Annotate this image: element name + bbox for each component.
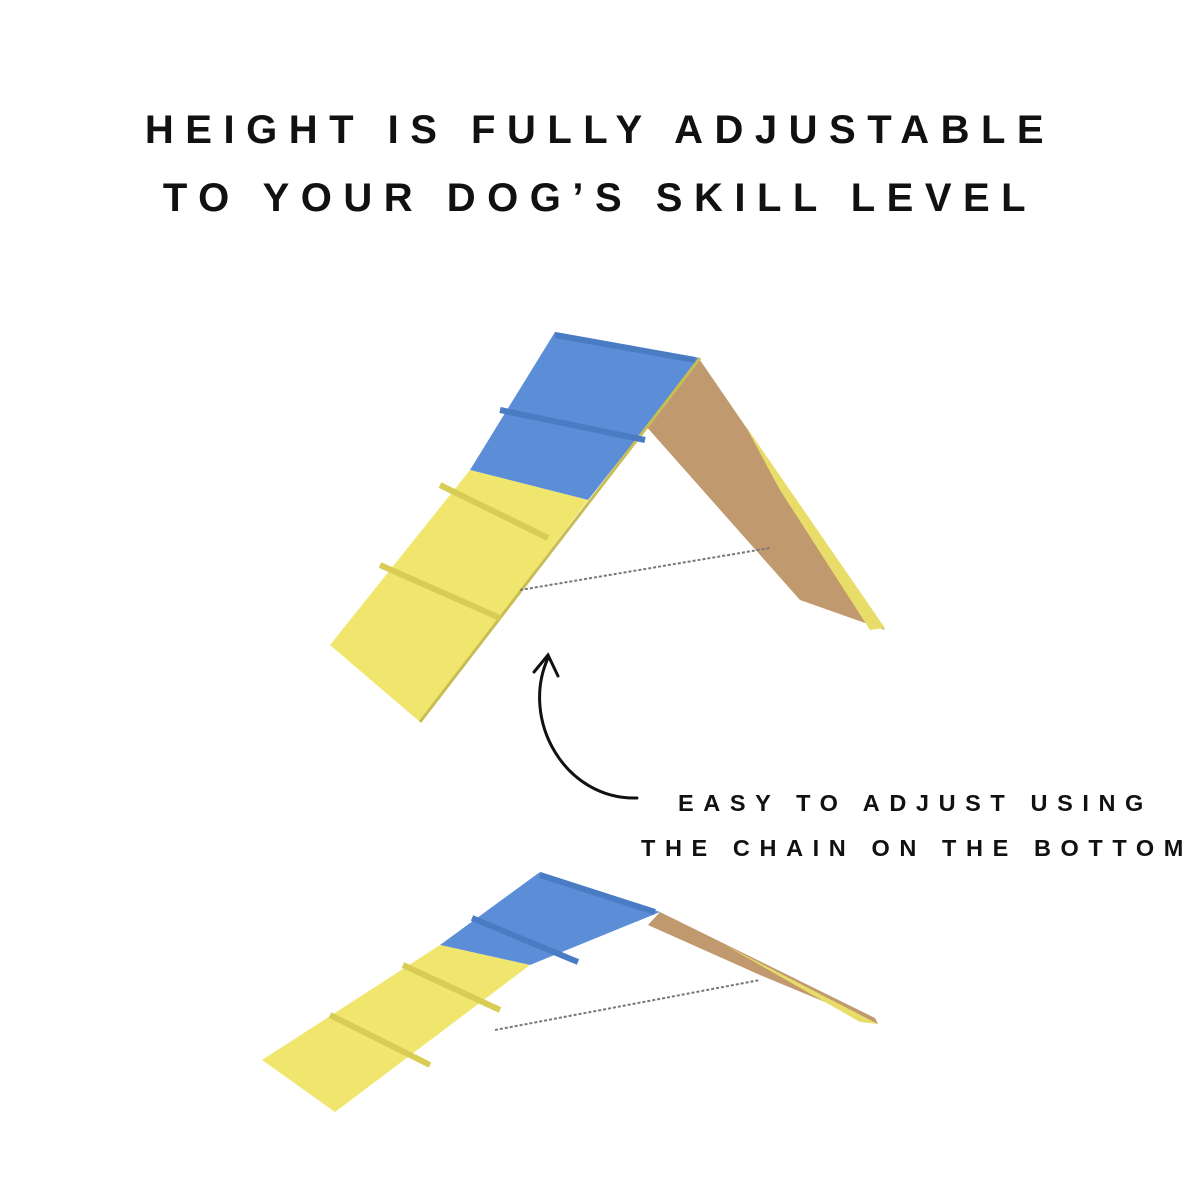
callout text: EASY TO ADJUST USING <box>678 790 1153 816</box>
callout text: THE CHAIN ON THE BOTTOM <box>641 835 1193 861</box>
title <box>145 108 1055 220</box>
callout text <box>641 790 1193 861</box>
arrow <box>534 655 637 798</box>
title: HEIGHT IS FULLY ADJUSTABLE <box>145 108 1055 152</box>
illustration: low A-frame <box>262 872 878 1112</box>
title: TO YOUR DOG’S SKILL LEVEL <box>163 176 1037 220</box>
